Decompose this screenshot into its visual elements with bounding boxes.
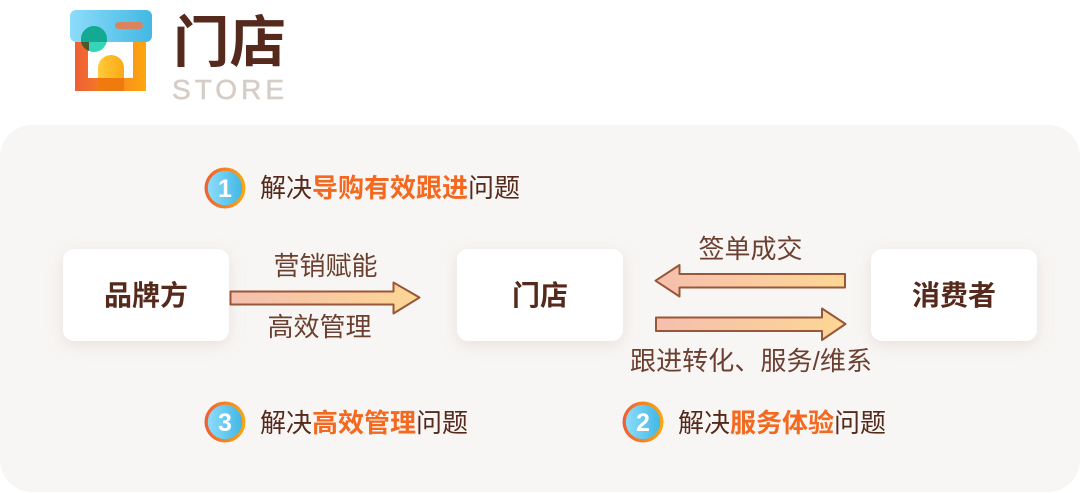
badge: step 2: 2 <box>636 409 650 437</box>
icon: store logo <box>70 10 152 91</box>
label: brand empowerment: 营销赋能 <box>273 251 378 281</box>
badge: step 3 <box>204 402 246 442</box>
card: store: 门店 <box>512 280 568 311</box>
heading: step 1: 解决导购有效跟进问题 <box>260 173 520 203</box>
card: store <box>457 249 623 341</box>
arrow: store to consumer <box>656 308 846 340</box>
card: brand <box>63 249 229 341</box>
arrow: brand to store <box>230 282 420 314</box>
label: follow-up and service: 跟进转化、服务/维系 <box>630 346 872 376</box>
title: 门店 <box>173 11 286 74</box>
card: brand: 品牌方 <box>104 280 188 311</box>
subtitle: STORE <box>172 74 284 105</box>
label: efficient management: 高效管理 <box>267 312 372 342</box>
badge: step 2 <box>622 402 664 442</box>
badge: step 1: 1 <box>218 175 232 203</box>
card: consumer: 消费者 <box>912 280 996 311</box>
heading: step 3: 解决高效管理问题 <box>260 408 468 438</box>
label: deal closed: 签单成交 <box>698 234 803 264</box>
panel: flow diagram <box>0 125 1080 492</box>
badge: step 3: 3 <box>218 409 232 437</box>
arrow: consumer to store <box>656 265 845 296</box>
card: consumer <box>871 249 1037 341</box>
heading: step 2: 解决服务体验问题 <box>678 408 886 438</box>
badge: step 1 <box>204 168 246 208</box>
